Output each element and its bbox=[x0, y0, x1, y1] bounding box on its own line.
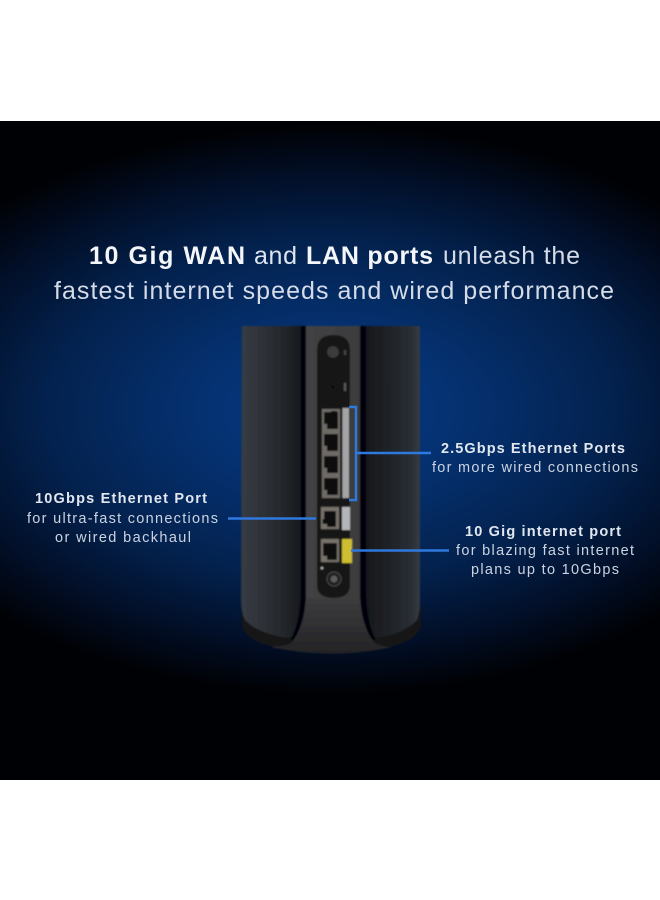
wps marks bbox=[344, 350, 346, 355]
port 5 bbox=[321, 507, 339, 529]
power socket bbox=[327, 572, 341, 586]
port 3 bbox=[324, 456, 338, 473]
router base bbox=[242, 606, 421, 653]
callout: 10Gbps Ethernet Port bbox=[27, 491, 218, 546]
status led bbox=[321, 567, 323, 569]
port 6 yellow label bbox=[342, 539, 352, 563]
callout: 10Gbps Ethernet Port: for ultra-fast connections bbox=[27, 511, 218, 527]
port 2 bbox=[324, 434, 338, 451]
callout: 10 Gig internet port bbox=[456, 524, 634, 578]
port 6 bbox=[321, 539, 339, 562]
router left pod bbox=[241, 326, 302, 638]
port block bbox=[322, 409, 340, 498]
title: LAN ports bbox=[306, 242, 433, 270]
callout: 10Gbps Ethernet Port: 10Gbps Ethernet Port bbox=[35, 491, 207, 507]
port 6 cavity bbox=[323, 543, 337, 560]
router centre column bbox=[272, 326, 392, 654]
callout: 10 Gig internet port: for blazing fast internet bbox=[456, 543, 634, 559]
callout: 10 Gig internet port: plans up to 10Gbps bbox=[471, 562, 619, 578]
router black control panel bbox=[317, 335, 350, 598]
title: and bbox=[254, 242, 297, 270]
port 4 bbox=[324, 478, 338, 495]
callout connector: 10Gbps port bbox=[228, 517, 316, 520]
callout: 2.5Gbps Ethernet Ports: for more wired connections bbox=[432, 460, 638, 476]
router right pod bbox=[365, 326, 420, 638]
callout: 2.5Gbps Ethernet Ports: 2.5Gbps Ethernet Ports bbox=[441, 441, 625, 457]
port 1 bbox=[324, 411, 338, 429]
router gaps bbox=[290, 326, 376, 640]
callout: 10 Gig internet port: 10 Gig internet port bbox=[465, 524, 621, 540]
router base shading bbox=[272, 598, 392, 654]
title: 10 Gig WAN bbox=[89, 242, 245, 270]
callout connector: 2.5Gbps bracket bbox=[349, 407, 431, 500]
reset hole bbox=[332, 386, 334, 388]
router bbox=[241, 326, 421, 654]
callout connector: 10 Gig internet port bbox=[351, 549, 449, 552]
title: fastest internet speeds and wired performance bbox=[54, 277, 614, 305]
port label plate bbox=[342, 408, 349, 498]
title: unleash the bbox=[443, 242, 580, 270]
callout: 10Gbps Ethernet Port: or wired backhaul bbox=[55, 530, 191, 546]
dark blue background panel bbox=[0, 121, 660, 780]
callout: 2.5Gbps Ethernet Ports bbox=[432, 441, 638, 476]
port 5 cavity bbox=[322, 511, 336, 527]
port 5 label bbox=[342, 507, 350, 530]
power button bbox=[326, 346, 340, 358]
title bbox=[54, 242, 614, 305]
small label bbox=[344, 383, 346, 391]
